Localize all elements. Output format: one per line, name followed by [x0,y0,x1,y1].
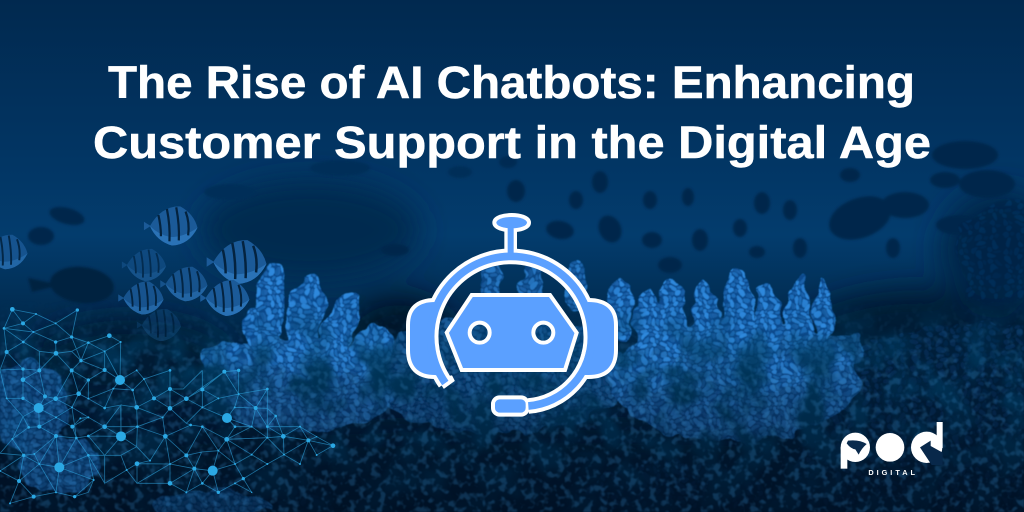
robot white outline layer [410,217,614,413]
dim reef rock at right and bottom [130,199,1024,512]
mesh nodes [0,307,335,504]
background: dark reef shadows [30,180,1024,512]
bottom darkening [0,350,1024,512]
logo letter p with whale [841,433,870,469]
network mesh overlay [0,307,335,504]
title: The Rise of AI Chatbots: Enhancing [108,57,915,108]
logo: pod digital [841,422,943,477]
logo wordmark digital: DIGITAL [868,468,916,477]
fine reef texture [0,317,1024,512]
branching coral [201,259,863,442]
striped fish school [0,206,266,341]
title [93,57,931,168]
left reef glow [0,360,270,512]
logo letter d with wedge [911,422,943,465]
robot face with eyes [447,295,577,370]
robot blue fill layer [410,217,614,413]
mesh lines [0,309,333,503]
dark reef patches over coral [1,305,1024,509]
icon: chatbot with headset [410,217,614,413]
logo letter o [876,433,904,462]
title: Customer Support in the Digital Age [93,117,931,168]
dark silhouette fish [28,141,1015,306]
